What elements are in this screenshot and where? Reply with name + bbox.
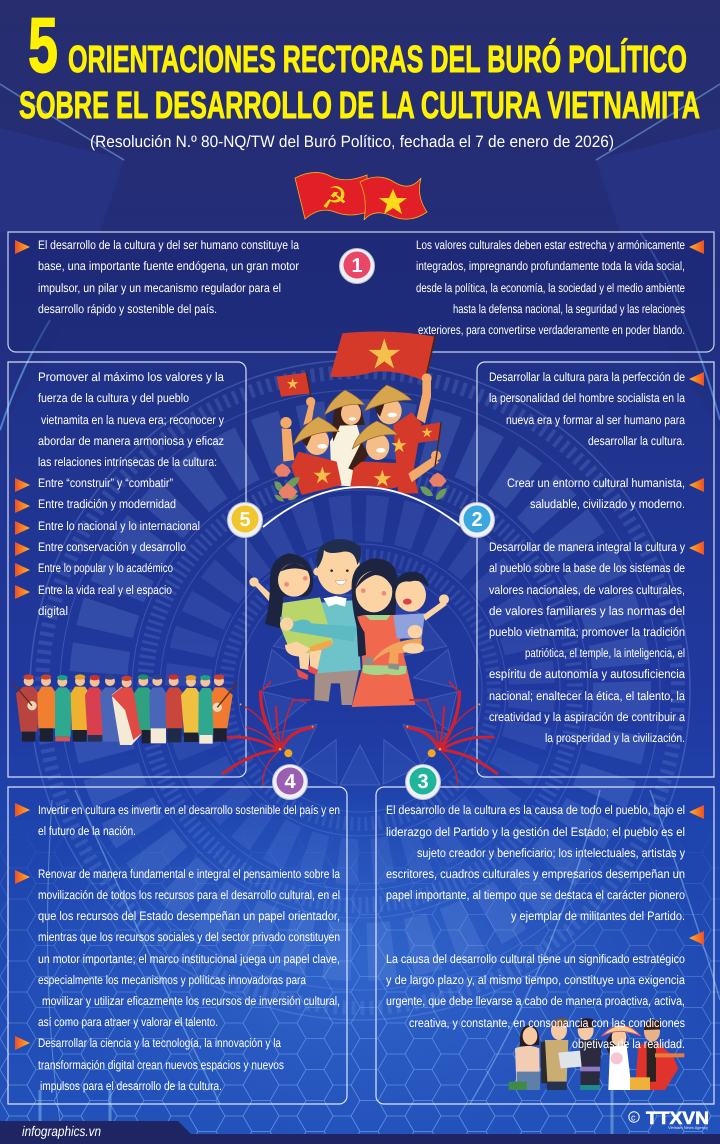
text: orientation 4 xyxy=(38,803,340,1093)
illustration: group in traditional dress xyxy=(13,674,237,745)
copyright and agency logo: c xyxy=(631,1112,636,1122)
text: orientation 1 right xyxy=(416,238,685,337)
text: orientation 3: sujeto creador y beneficiario; los intelectuales, artistas y xyxy=(417,846,686,860)
text: orientation 2: Desarrollar la cultura para la perfección de xyxy=(489,370,685,384)
text: orientation 3: creativa, y constante, en consonancia con las condiciones xyxy=(409,1016,685,1030)
text: orientation 2 xyxy=(489,370,686,745)
text: orientation 2: espíritu de autonomía y autosuficiencia xyxy=(489,667,685,681)
text: orientation 3: y de largo plazo y, al mismo tiempo, constituye una exigencia xyxy=(386,973,685,987)
hexagon network pattern xyxy=(0,820,720,1134)
website credit: infographics.vn xyxy=(22,1123,101,1139)
copyright and agency logo xyxy=(629,1108,709,1130)
text: orientation 5: vietnamita en la nueva era; reconocer y xyxy=(41,413,225,427)
text: orientation 1 left: El desarrollo de la cultura y del ser humano constituye la xyxy=(38,238,299,252)
subtitle: (Resolución N.º 80-NQ/TW del Buró Político, fechada el 7 de enero de 2026) xyxy=(90,133,614,151)
bullet arrows pointing left xyxy=(689,240,704,945)
panel: orientation 4 xyxy=(8,787,347,1104)
text: orientation 5: abordar de manera armoniosa y eficaz xyxy=(38,434,224,448)
text: orientation 2: saludable, civilizado y moderno. xyxy=(530,497,685,511)
badge 4: 4 xyxy=(284,771,296,793)
footer band xyxy=(0,1121,720,1144)
text: orientation 4: un motor importante; el marco institucional juega un papel clave, xyxy=(38,952,340,966)
text: orientation 4: mientras que los recursos sociales y del sector privado constituyen xyxy=(38,930,340,944)
title xyxy=(19,1,700,127)
text: orientation 3: urgente, que debe llevarse a cabo de manera proactiva, activa, xyxy=(386,994,685,1008)
text: orientation 2: creatividad y la aspiración de contribuir a xyxy=(489,710,685,724)
text: orientation 2: la prosperidad y la civilización. xyxy=(545,731,685,745)
text: orientation 5: Entre lo popular y lo académico xyxy=(38,561,173,575)
copyright and agency logo: Vietnam News Agency xyxy=(668,1125,708,1130)
text: orientation 2: desarrollar la cultura. xyxy=(588,434,685,448)
arch frame xyxy=(263,487,462,527)
text: orientation 1 left: base, una importante fuente endógena, un gran motor xyxy=(38,259,299,273)
text: orientation 2: nueva era y formar al ser humano para xyxy=(506,413,685,427)
text: orientation 4: movilización de todos los recursos para el desarrollo cultural, en el xyxy=(38,888,340,902)
text: orientation 4: así como para atraer y valorar el talento. xyxy=(38,1015,218,1029)
text: orientation 4: Desarrollar la ciencia y la tecnología, la innovación y la xyxy=(38,1036,281,1050)
text: orientation 1 left xyxy=(38,238,299,316)
text: orientation 4: transformación digital crean nuevos espacios y nuevos xyxy=(38,1058,284,1072)
text: orientation 2: Crear un entorno cultural humanista, xyxy=(507,476,685,490)
bullet arrows pointing right xyxy=(15,240,30,1050)
text: orientation 2: de valores familiares y las normas del xyxy=(489,604,685,618)
text: orientation 2: nacional; enaltecer la ética, el talento, la xyxy=(489,689,685,703)
text: orientation 5: Entre la vida real y el espacio xyxy=(38,583,172,597)
text: orientation 4: Invertir en cultura es invertir en el desarrollo sostenible del país y en xyxy=(38,803,340,817)
text: orientation 5: las relaciones intrínsecas de la cultura: xyxy=(38,455,217,469)
text: orientation 5 xyxy=(38,370,225,618)
text: orientation 3: objetivas de la realidad. xyxy=(572,1037,685,1051)
text: orientation 2: Desarrollar de manera integral la cultura y xyxy=(489,540,686,554)
text: orientation 4: el futuro de la nación. xyxy=(38,824,136,838)
panel: orientation 1 xyxy=(8,232,714,352)
text: orientation 2: valores nacionales, de valores culturales, xyxy=(489,583,685,597)
text: orientation 5: Entre conservación y desarrollo xyxy=(38,540,186,554)
text: orientation 5: Promover al máximo los valores y la xyxy=(38,370,224,384)
light curves xyxy=(40,790,720,1134)
badge 3: 3 xyxy=(417,771,429,793)
text: orientation 4: especialmente los mecanismos y políticas innovadoras para xyxy=(38,973,306,987)
text: orientation 3: escritores, cuadros culturales y empresarios desempeñan un xyxy=(386,867,685,881)
text: orientation 2: la personalidad del hombre socialista en la xyxy=(489,391,685,405)
text: orientation 4: que los recursos del Estado desempeñan un papel orientador, xyxy=(38,909,340,923)
text: orientation 5: Entre lo nacional y lo internacional xyxy=(38,519,200,533)
panel: orientation 3 xyxy=(376,787,714,1104)
badge 5: 5 xyxy=(239,509,251,531)
text: orientation 3: liderazgo del Partido y la gestión del Estado; el pueblo es el xyxy=(386,825,685,839)
title: 5 xyxy=(28,1,58,89)
text: orientation 4: impulsos para el desarrollo de la cultura. xyxy=(40,1079,222,1093)
badge 2: 2 xyxy=(471,509,483,531)
panel: orientation 2 xyxy=(477,362,714,777)
text: orientation 5: Entre “construir” y “combatir” xyxy=(38,476,173,490)
illustration: students xyxy=(509,1018,684,1090)
text: orientation 3: papel importante, al tiempo que se destaca el carácter pionero xyxy=(386,888,685,902)
badge 1 xyxy=(340,248,374,284)
text: orientation 3: y ejemplar de militantes del Partido. xyxy=(511,909,685,923)
badge 2 xyxy=(460,502,494,538)
icon: party and national flags xyxy=(295,172,427,220)
text: orientation 1 left: desarrollo rápido y sostenible del país. xyxy=(38,302,217,316)
text: orientation 4: Renovar de manera fundamental e integral el pensamiento sobre la xyxy=(38,867,340,881)
illustration: fireworks right xyxy=(406,682,497,785)
copyright and agency logo: TTXVN xyxy=(646,1108,709,1128)
text: orientation 3 xyxy=(386,803,686,1051)
text: orientation 3: La causa del desarrollo cultural tiene un significado estratégico xyxy=(386,952,685,966)
panel: orientation 5 xyxy=(8,362,246,777)
illustration: family xyxy=(249,539,449,707)
badge 4 xyxy=(272,764,308,800)
text: orientation 2: al pueblo sobre la base de los sistemas de xyxy=(489,561,685,575)
illustration: fireworks left xyxy=(223,682,314,785)
text: orientation 5: digital xyxy=(38,604,68,618)
icon: party and national flags: ☭ xyxy=(321,182,348,215)
text: orientation 1 left: impulsor, un pilar y un mecanismo regulador para el xyxy=(38,281,281,295)
bronze drum pattern xyxy=(30,360,690,1020)
illustration: crowd with flags xyxy=(274,331,447,502)
text: orientation 5: fuerza de la cultura y del pueblo xyxy=(38,391,189,405)
text: orientation 5: Entre tradición y modernidad xyxy=(38,497,176,511)
badge 5 xyxy=(228,502,262,538)
badge 3 xyxy=(406,764,440,800)
badge 1: 1 xyxy=(351,255,363,277)
text: orientation 2: pueblo vietnamita; promover la tradición xyxy=(489,625,685,639)
text: orientation 4: movilizar y utilizar eficazmente los recursos de inversión cultural, xyxy=(42,994,340,1008)
